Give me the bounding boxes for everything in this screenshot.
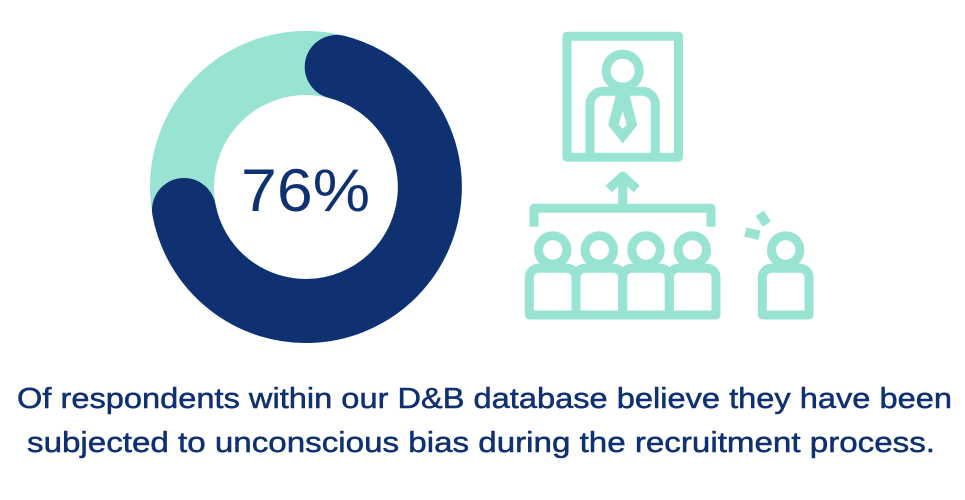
donut value label: 76% <box>241 157 370 224</box>
arrow pointing up to portrait <box>609 176 637 208</box>
emphasis marks by excluded person <box>744 211 771 240</box>
group of four people <box>529 236 716 315</box>
donut chart: 76% <box>182 63 430 311</box>
bracket grouping four people <box>534 208 711 227</box>
donut value arc <box>184 67 430 311</box>
excluded person <box>762 236 809 315</box>
icon: framed manager portrait <box>567 36 678 157</box>
caption line 2: subjected to unconscious bias during the recruitment process. <box>27 427 935 459</box>
icon: candidate selected from a group while one person is left out <box>529 36 809 315</box>
caption line 1: Of respondents within our D&B database believe they have been <box>17 383 952 415</box>
caption text <box>17 383 952 459</box>
donut remainder ring <box>182 63 430 311</box>
